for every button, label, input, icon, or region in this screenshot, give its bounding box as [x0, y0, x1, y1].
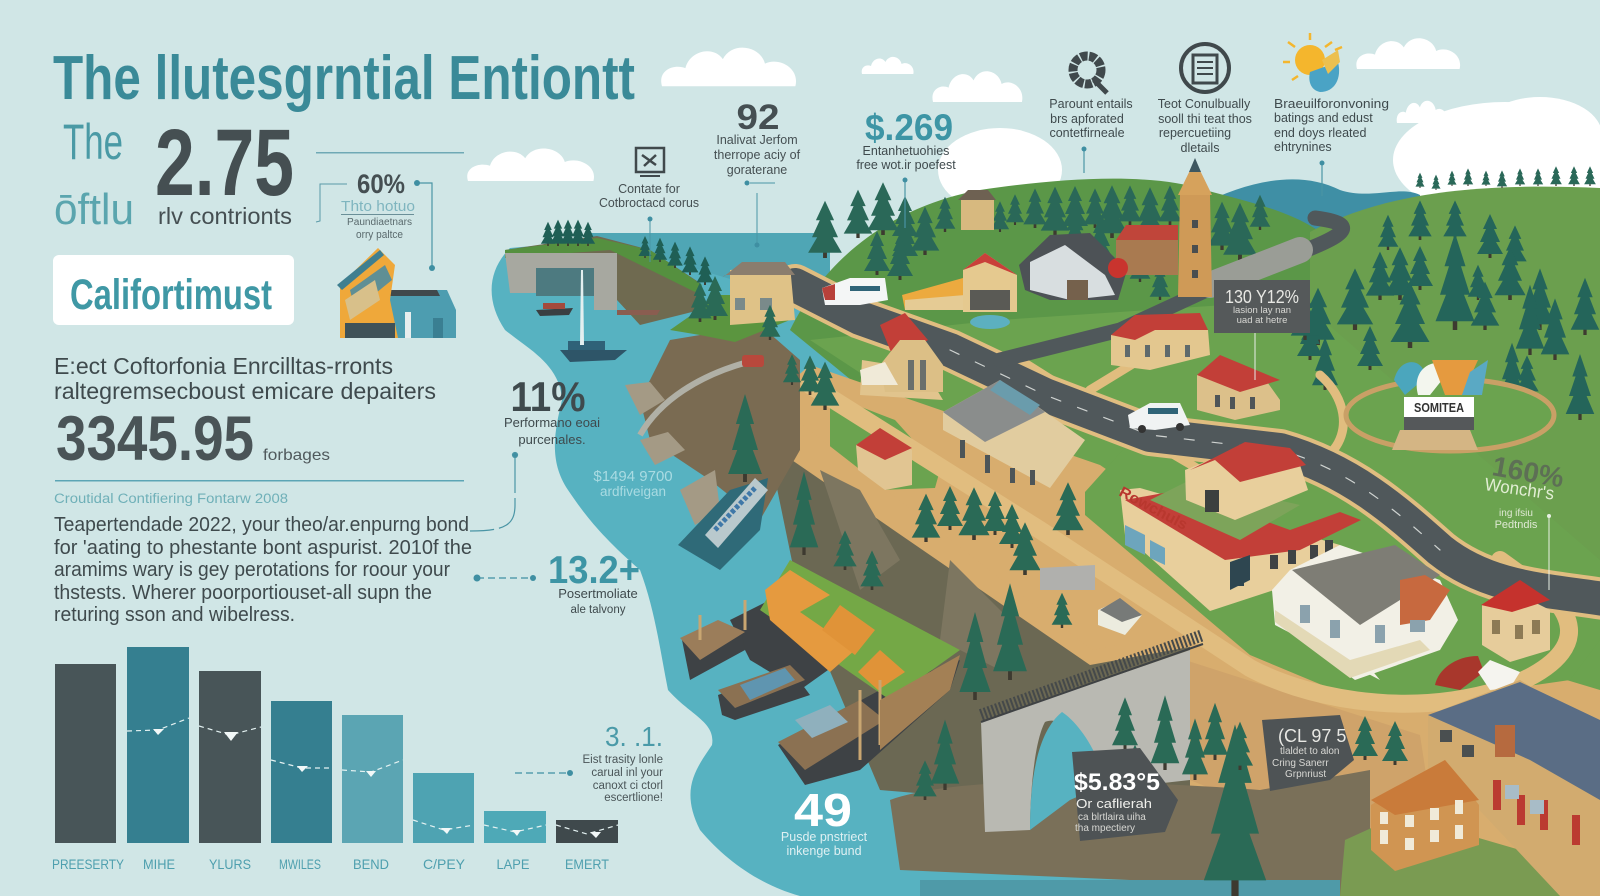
small red roof house: [1481, 580, 1550, 662]
callout: 92: Inalivat Jerfom: [716, 133, 798, 147]
bridge: [981, 635, 1203, 832]
water stat: $1494 9700: [593, 468, 673, 485]
callout: contact: [599, 182, 699, 262]
callout: 60%: 60%: [357, 169, 405, 199]
white grey-roof mansion: [1272, 545, 1458, 680]
callout: 3.269: free wot.ir poefest: [856, 158, 956, 172]
callout: braeuil: [1274, 97, 1389, 196]
callout: contact: Cotbroctacd corus: [599, 196, 699, 210]
long grey building: [943, 380, 1085, 488]
callout: 3.1: [515, 721, 663, 804]
back tree row: [808, 166, 1596, 300]
callout: 13.2: ale talvony: [571, 604, 626, 616]
callout: 11%: purcenales.: [518, 432, 586, 447]
sand paths: [810, 335, 1569, 704]
sign with ring fence: [1346, 360, 1554, 451]
water stat: ardfiveigan: [600, 484, 666, 499]
chart: labels: PREESERTY: [52, 856, 125, 872]
plate: CL 97 5: [1262, 715, 1354, 791]
callout: 160%: ing ifsiu: [1499, 508, 1533, 519]
callout: 11%: 11%: [510, 373, 586, 420]
corner red roof house: [1197, 355, 1280, 420]
tan plateau and cliff: [765, 365, 1600, 896]
pond: [970, 315, 1010, 329]
plate: 5.83: ca blrtlaira uiha: [1078, 812, 1146, 823]
callout: 60%: Paundiaetnars: [347, 217, 412, 228]
connector from paragraph: [470, 452, 518, 531]
car one: [822, 278, 888, 305]
road: [795, 218, 1600, 600]
callout: teot: repercuetiing: [1159, 126, 1231, 140]
callout: 49: inkenge bund: [786, 844, 862, 858]
plate: CL 97 5: (CL 97 5: [1278, 726, 1346, 746]
plate: 130 Y12%: uad at hetre: [1237, 315, 1287, 326]
sign with ring fence: SOMITEA: [1414, 400, 1465, 415]
callout: 11%: [504, 373, 600, 447]
hill house: [958, 190, 996, 230]
callout: 3.269: Entanhetuohies: [863, 144, 949, 158]
blue roof building: [1428, 680, 1600, 896]
callout: parount: brs apforated: [1050, 112, 1124, 126]
plate: 5.83: [1072, 748, 1178, 841]
callout: 3.1: Eist trasity lonle: [582, 754, 663, 766]
plate: CL 97 5: tlaldet to alon: [1280, 746, 1340, 757]
callout: 160%: 160%: [1490, 450, 1566, 493]
distant sea: [590, 233, 830, 353]
plate: CL 97 5: Grpnriust: [1285, 769, 1326, 780]
plate: 5.83: tha mpectiery: [1075, 823, 1135, 834]
plate: 5.83: Or caflierah: [1076, 796, 1152, 811]
callout: 160%: Pedtndis: [1495, 519, 1538, 531]
callout: 11%: Performano eoai: [504, 415, 600, 430]
white house with dark roof: [1019, 225, 1178, 300]
plate: 130 Y12%: lasion lay nan: [1233, 305, 1291, 316]
callout: 49: [781, 784, 868, 858]
icon: document: [636, 148, 664, 176]
callout: braeuil: batings and edust: [1274, 111, 1373, 125]
icon: house: [337, 248, 456, 338]
callout: 13.2: [474, 549, 640, 616]
plate: 130 Y12%: 130 Y12%: [1225, 287, 1299, 307]
highlighted name box: Califortimust: [70, 271, 272, 319]
paragraph: aramims wary is gey perotations for roour your: [54, 559, 450, 581]
main land green: [810, 300, 1600, 720]
headland trees: [688, 276, 1084, 628]
callout: 160%: [1483, 450, 1566, 590]
chart: labels: YLURS: [209, 856, 251, 872]
dock complex: [680, 560, 960, 785]
paragraph: thstests. Wherer poorportiouset-all supn the: [54, 582, 432, 604]
large red roof complex: Rowchuls: [1116, 484, 1190, 534]
callout: braeuil: Braeuilforonvoning: [1274, 97, 1389, 111]
description heading: raltegremsecboust emicare depaiters: [54, 378, 436, 404]
coastal water: [492, 240, 1400, 896]
clock tower: [1178, 158, 1212, 297]
rule: [55, 480, 464, 482]
chart: labels: BEND: [353, 856, 389, 872]
house on headland: [722, 262, 795, 325]
callout: 13.2: Posertmoliate: [558, 586, 638, 601]
paragraph: for 'aating to phestante bont aspurist. 2010f the: [54, 537, 472, 559]
plate: CL 97 5: Cring Sanerr: [1272, 758, 1329, 769]
right hill forest: [1291, 200, 1599, 420]
callout: 3.1: 3. .1.: [605, 721, 663, 752]
small shed: [1040, 565, 1142, 635]
callout: 13.2: 13.2+: [548, 549, 640, 592]
callout: 49: Pusde pnstriect: [781, 830, 868, 844]
callout: 60%: orry paltce: [356, 229, 403, 241]
main stat: 2.75: [155, 110, 294, 216]
left hill: [790, 179, 1340, 420]
callout: 3.269: [856, 107, 956, 228]
plate: 130 Y12%: [1214, 280, 1310, 380]
chart: labels: [52, 856, 609, 872]
callout: 60%: [316, 169, 435, 271]
icon: gear magnifier: [1073, 56, 1107, 93]
boats: [536, 270, 660, 362]
chart: labels: EMERT: [565, 856, 609, 872]
callout: 92: [714, 98, 801, 248]
chart: labels: C/PEY: [423, 856, 466, 872]
small red house: [856, 428, 912, 490]
callout: 160%: Wonchr's: [1483, 474, 1556, 504]
ship hull: [678, 478, 768, 570]
red roof townhouse: [860, 313, 943, 400]
car two: [1128, 403, 1190, 433]
far mountain: [1200, 179, 1420, 260]
icon: circled document: [1181, 44, 1229, 92]
callout: teot: [1158, 97, 1252, 155]
chart: labels: MIHE: [143, 856, 175, 872]
right hill: [1310, 187, 1600, 660]
large red roof complex: [1116, 442, 1361, 611]
highlighted name box: [53, 255, 294, 325]
description heading: E:ect Coftorfonia Enrcilltas-rronts: [54, 353, 393, 379]
yellow house with orange wing: [902, 253, 1017, 312]
subtitle word: The: The: [63, 114, 123, 170]
paragraph: [54, 514, 472, 626]
main stat caption: rlv contrionts: [158, 203, 292, 229]
subtitle word: oftlu: ōftlu: [54, 185, 134, 234]
lower trees: [913, 583, 1408, 896]
chart: labels: MWILES: [279, 856, 321, 872]
title: The llutesgrntial Entiontt: [53, 44, 635, 113]
orange brick house: [1371, 760, 1479, 871]
chart: labels: LAPE: [496, 856, 530, 872]
paragraph: returing sson and wibelress.: [54, 604, 295, 626]
clouds: [467, 38, 1600, 218]
big number: 3345.95: [56, 404, 254, 474]
rule: [316, 152, 464, 154]
callout: teot: dletails: [1181, 141, 1219, 155]
callout: parount: [1049, 97, 1133, 173]
paragraph heading: Croutidal Contifiering Fontarw 2008: [54, 491, 288, 506]
callout: contact: Contate for: [618, 182, 680, 196]
callout: parount: contetfirneale: [1049, 126, 1125, 140]
callout: 3.1: canoxt ci ctorl: [593, 780, 663, 792]
chart: bars: [55, 647, 618, 843]
red car: [1435, 656, 1520, 690]
water stat: [593, 468, 673, 499]
callout: 49: 49: [794, 784, 852, 836]
mid red roof house: [1111, 313, 1210, 370]
description heading: [54, 353, 436, 404]
plate: 5.83: $5.83°5: [1074, 769, 1160, 796]
green base at lower right: [1340, 815, 1600, 896]
callout: 3.1: escertlione!: [604, 792, 663, 804]
callout: 60%: Thto hotuo: [341, 198, 415, 215]
central rock headland: [625, 295, 800, 525]
callout: braeuil: end doys rleated: [1274, 126, 1366, 140]
callout: 3.269: $.269: [865, 107, 953, 148]
paragraph: Teapertendade 2022, your theo/ar.enpurng bond: [54, 514, 469, 536]
callout: 92: goraterane: [727, 163, 787, 177]
callout: teot: Teot Conulbually: [1158, 97, 1251, 111]
callout: teot: sooll thi teat thos: [1158, 112, 1252, 126]
callout: parount: Parount entails: [1049, 97, 1133, 111]
callout: 3.1: carual inl your: [591, 767, 663, 779]
callout: 92: therrope aciy of: [714, 148, 801, 162]
callout: 92: 92: [736, 98, 780, 137]
big number unit: forbages: [263, 447, 330, 464]
left pier peninsula: [505, 220, 713, 325]
icon: sun and water: [1283, 33, 1342, 92]
callout: braeuil: ehtrynines: [1274, 140, 1332, 154]
